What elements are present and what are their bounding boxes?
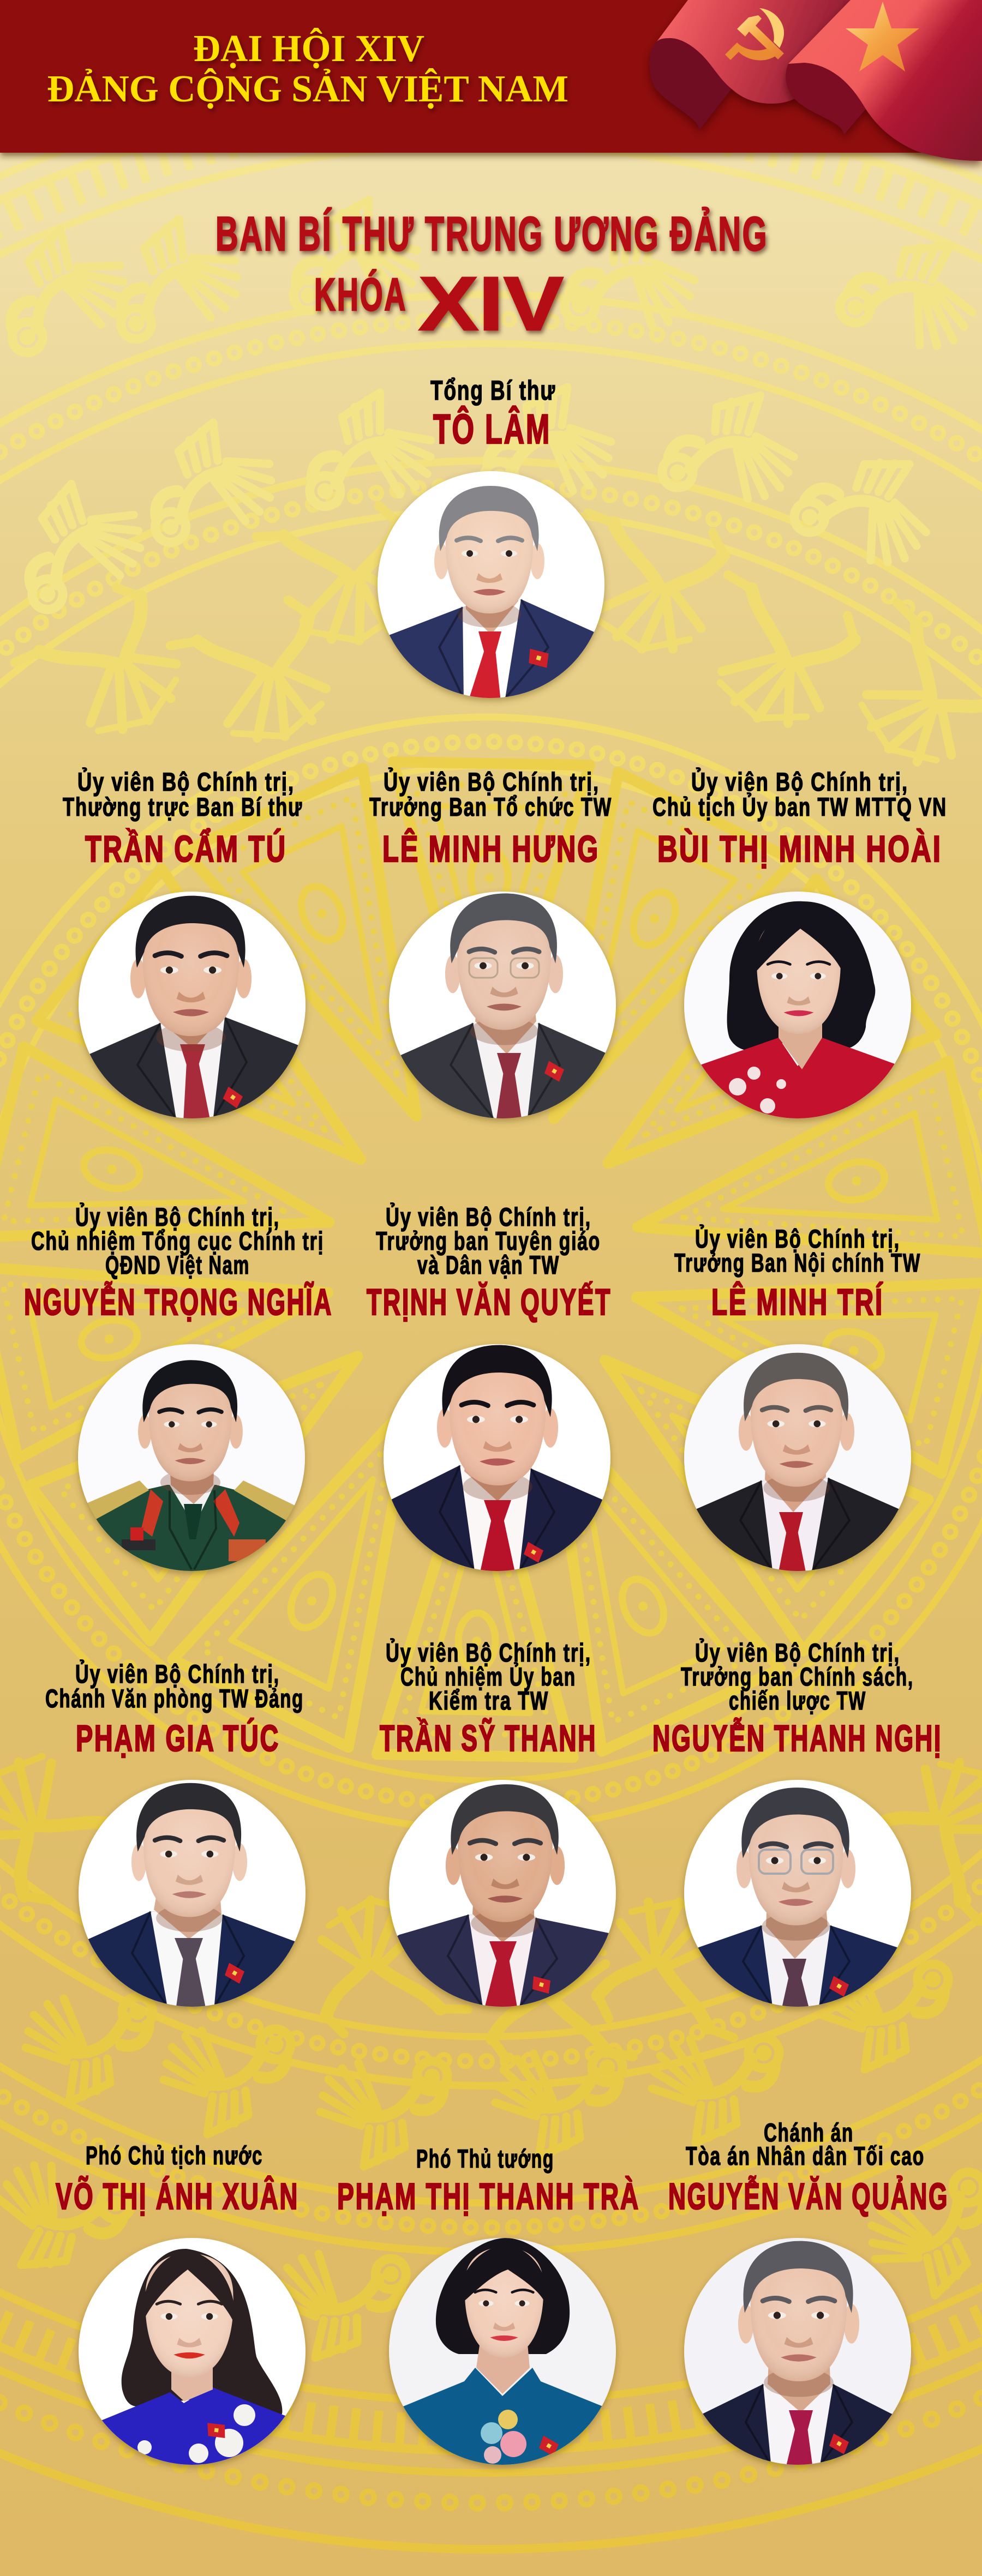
member: Nguyễn Thanh Nghị [652,1638,942,2035]
portrait [656,2238,939,2493]
portrait [50,1780,334,2035]
portrait [373,470,608,705]
role: Trưởng Ban Tổ chức TW [369,792,612,821]
name: LÊ MINH TRÍ [711,1281,884,1323]
role: QĐND Việt Nam [105,1250,250,1279]
banner title [47,28,568,110]
name: TRỊNH VĂN QUYẾT [367,1281,612,1323]
flag: hammer and sickle [650,0,851,130]
role [45,1659,304,1713]
role: Phó Chủ tịch nước [86,2141,263,2170]
role: Ủy viên Bộ Chính trị, [695,1224,900,1253]
member: Bùi Thị Minh Hoài [652,767,947,1147]
role [31,1202,324,1279]
main heading: KHÓA [314,269,407,320]
role: Kiểm tra TW [429,1686,549,1715]
name: NGUYỄN TRỌNG NGHĨA [24,1281,333,1323]
role: Trưởng ban Tuyên giáo [376,1226,601,1255]
banner title: ĐẠI HỘI XIV [193,28,424,70]
name: PHẠM THỊ THANH TRÀ [337,2176,640,2217]
name: LÊ MINH HƯNG [382,828,600,870]
member: Lê Minh Hưng [361,767,644,1147]
member: Nguyễn Trọng Nghĩa [24,1202,333,1599]
portrait [656,1344,939,1599]
name: TRẦN CẨM TÚ [85,828,287,870]
portrait [361,1780,644,2035]
role: Chủ nhiệm Ủy ban [400,1662,576,1691]
header banner [0,0,982,161]
main heading: XIV [418,261,564,346]
role: Ủy viên Bộ Chính trị, [75,1202,280,1231]
name: PHẠM GIA TÚC [76,1718,280,1759]
role: Chánh Văn phòng TW Đảng [45,1684,304,1713]
portrait [656,1780,939,2035]
name: TRẦN SỸ THANH [380,1717,597,1759]
portrait [355,1344,639,1599]
banner title: ĐẢNG CỘNG SẢN VIỆT NAM [47,68,568,110]
member: Nguyễn Văn Quảng [656,2118,949,2493]
portrait [361,892,644,1147]
role: Ủy viên Bộ Chính trị, [77,767,295,796]
role [386,1638,591,1715]
portrait [656,892,939,1147]
main heading [215,207,768,346]
role [369,767,612,821]
role: Ủy viên Bộ Chính trị, [695,1638,900,1667]
portrait [75,891,309,1124]
member: Trần Cẩm Tú [62,767,309,1124]
member: Tô Lâm [373,377,608,705]
role: Phó Thủ tướng [416,2144,554,2173]
role [681,1638,914,1715]
role [652,767,947,821]
role: Ủy viên Bộ Chính trị, [386,1202,591,1231]
member: Phạm Thị Thanh Trà [337,2144,644,2493]
member: Trần Sỹ Thanh [361,1638,644,2035]
role: Ủy viên Bộ Chính trị, [75,1659,280,1688]
portrait [50,1344,333,1599]
role [63,767,303,821]
member: Trịnh Văn Quyết [355,1202,639,1599]
role: chiến lược TW [729,1686,866,1715]
portrait [361,2238,644,2493]
role: Chủ nhiệm Tổng cục Chính trị [31,1226,324,1255]
member: Phạm Gia Túc [45,1659,334,2035]
member: Lê Minh Trí [656,1224,939,1599]
role: Ủy viên Bộ Chính trị, [386,1638,591,1667]
name: TÔ LÂM [433,406,551,453]
role [376,1202,601,1279]
flag: gold star [786,0,982,161]
role: và Dân vận TW [417,1250,560,1279]
role: Ủy viên Bộ Chính trị, [691,767,908,796]
name: VÕ THỊ ÁNH XUÂN [56,2175,299,2217]
role: Chánh án [764,2118,854,2147]
role [686,2118,925,2170]
role: Tổng Bí thư [430,375,556,406]
role: Ủy viên Bộ Chính trị, [384,767,600,796]
member: Võ Thị Ánh Xuân [50,2141,334,2493]
role [674,1224,921,1277]
role: Thường trực Ban Bí thư [63,792,303,821]
portrait [50,2238,334,2493]
